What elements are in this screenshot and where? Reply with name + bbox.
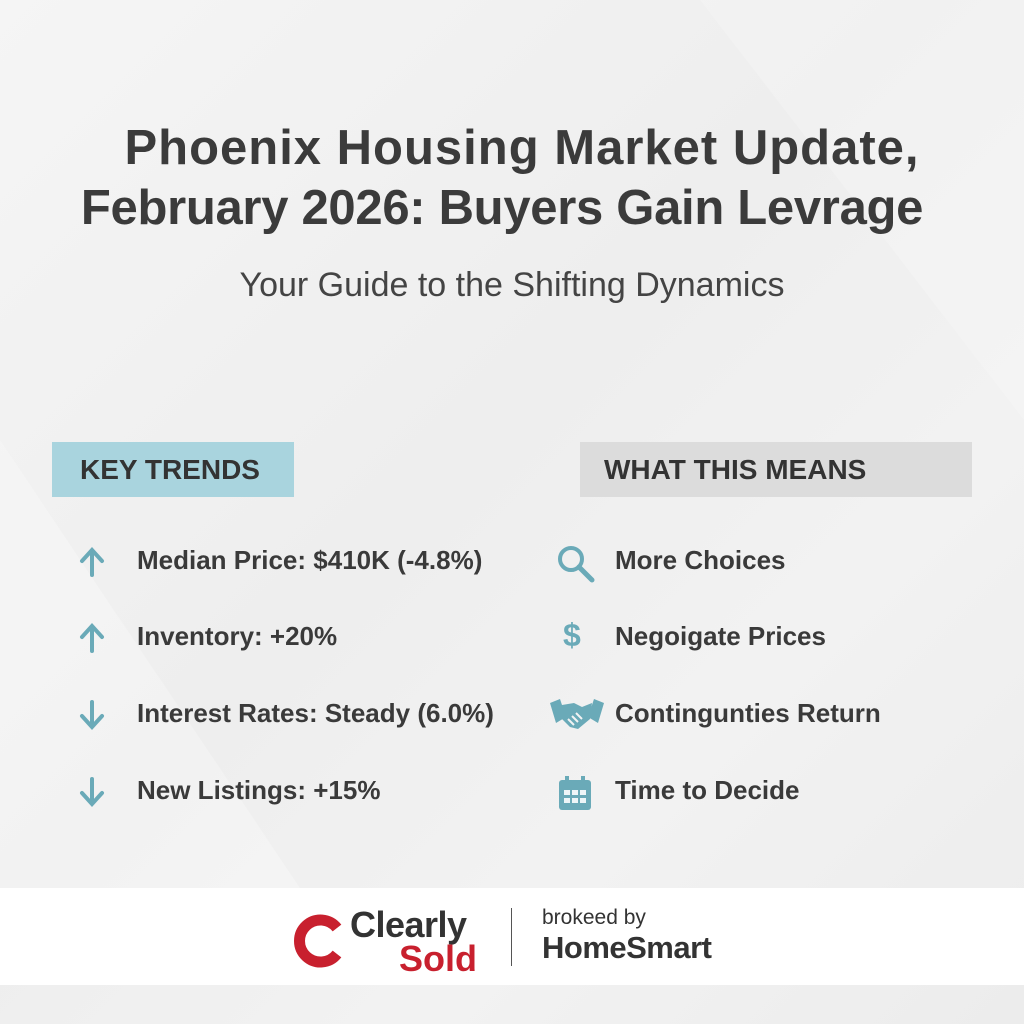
icon: dollar: $ [563,617,581,653]
logo: homesmart [542,906,712,965]
panel: what this means [550,545,881,810]
title: February 2026: Buyers Gain Levrage [81,181,923,235]
subtitle: Your Guide to the Shifting Dynamics [240,266,784,304]
trend: inventory: Inventory: +20% [137,621,337,651]
trend: new listings: New Listings: +15% [137,775,380,805]
item: negotiate: Negoigate Prices [615,621,826,651]
trend: interest rates: Interest Rates: Steady (6.0%) [137,698,494,728]
logo: clearly sold: Sold [399,938,477,979]
icon: down arrow [80,777,104,807]
divider [511,908,512,966]
item: more choices: More Choices [615,545,786,575]
header: what this means: WHAT THIS MEANS [604,454,866,485]
footer [0,888,1024,985]
icon: up arrow [80,623,104,653]
logo: homesmart: HomeSmart [542,930,712,965]
icon: down arrow [80,700,104,730]
logo: homesmart: brokeed by [542,906,646,929]
header: key trends: KEY TRENDS [80,454,260,485]
panel: key trends [80,545,494,807]
header: what this means [580,442,972,497]
icon: calendar [559,776,591,810]
logo: clearly sold [294,904,477,979]
icon: handshake [550,699,604,729]
icon: up arrow [80,547,104,577]
item: contingencies: Contingunties Return [615,698,881,728]
item: time to decide: Time to Decide [615,775,799,805]
header: key trends [52,442,294,497]
trend: median price: Median Price: $410K (-4.8%) [137,545,482,575]
icon: magnifier [558,546,594,582]
logo: clearly sold: Clearly [350,904,467,945]
title [81,121,923,235]
title: Phoenix Housing Market Update, [124,121,920,175]
